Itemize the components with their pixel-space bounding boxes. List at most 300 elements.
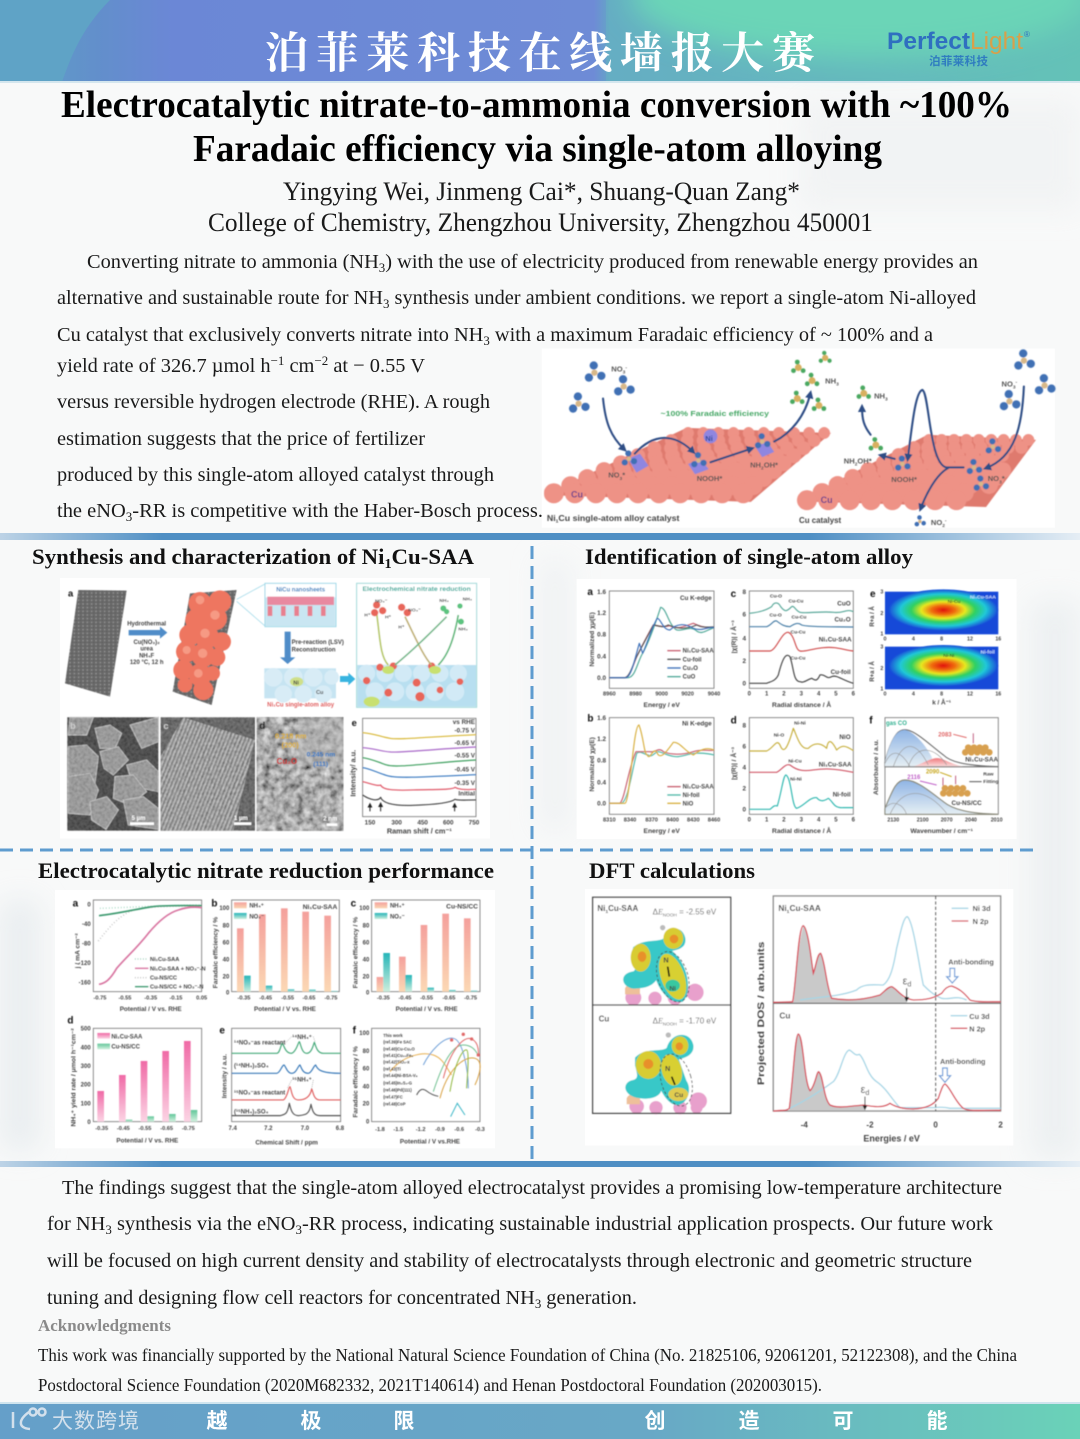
d: Ni EXAFS chart: Ni-Cu	[788, 758, 802, 764]
b: Faradaic efficiency chart Ni1Cu-SAA: 100	[219, 906, 230, 912]
b: SEM image	[67, 717, 158, 831]
scheme labels: 3	[623, 370, 626, 376]
a: Cu K-edge XANES chart: 1.6	[597, 589, 606, 596]
charge density: Cu	[593, 1005, 731, 1114]
abstract text: at − 0.55 V	[328, 355, 425, 377]
abstract text: the eNO	[57, 500, 126, 522]
heading: identification: Identification of single-atom alloy	[585, 544, 914, 569]
a: Cu K-edge XANES chart: Ni₁Cu-SAA	[683, 649, 714, 655]
e: Raman spectra chart: 600	[443, 820, 454, 827]
f: literature comparison chart: (ref.46)Pd(111)	[383, 1087, 412, 1092]
logo: PerfectLight: ®	[1024, 30, 1030, 39]
abstract text: estimation suggests that the price of fertilizer	[57, 428, 425, 450]
e: 1H NMR spectra chart: Chemical Shift / ppm	[255, 1139, 318, 1146]
e: 1H NMR spectra chart: (¹⁴NH₄)₂SO₄	[234, 1063, 269, 1070]
conclusion text: 3	[105, 1222, 112, 1237]
c: Cu EXAFS chart: CuO	[837, 601, 851, 608]
abstract text: produced by this single-atom alloyed catalyst through	[57, 464, 494, 486]
a: Cu K-edge XANES chart: 8960	[603, 692, 616, 698]
a: electrochemical nitrate reduction box: H⁺	[398, 624, 405, 630]
scheme labels: Ni	[547, 514, 555, 523]
e: 1H NMR spectra chart: ¹⁵NO₃⁻as reactant	[234, 1089, 285, 1096]
f: literature comparison chart	[352, 1026, 485, 1145]
d: NH4+ yield rate chart: -0.45	[117, 1126, 130, 1132]
d: NH4+ yield rate chart: -0.75	[182, 1126, 195, 1132]
e: wavelet transform heat maps: 0	[883, 637, 886, 643]
b: Ni K-edge XANES chart: 8370	[645, 818, 658, 824]
conclusion text: 3	[535, 1296, 541, 1311]
scheme labels: ~100% Faradaic efficiency	[661, 409, 770, 418]
a: LSV polarization chart: j / mA cm⁻²	[74, 932, 81, 969]
abstract text: −2	[314, 353, 328, 368]
e: wavelet transform heat maps: 0	[883, 692, 886, 698]
charge density: Cu: NOOH	[663, 1021, 677, 1026]
acknowledgments text	[38, 1345, 1017, 1395]
abstract text: 3	[126, 509, 132, 524]
scheme labels: NH	[750, 460, 761, 469]
b: Faradaic efficiency chart Ni1Cu-SAA: -0.65	[303, 996, 315, 1002]
DOS bottom: Cu	[773, 1010, 1001, 1111]
abstract text: ) with the use of electricity produced from renewable energy provides an	[385, 251, 978, 273]
b: SEM image: b	[70, 721, 76, 731]
c: Faradaic efficiency chart Cu-NS/CC: NH₄⁺	[390, 902, 405, 909]
f: literature comparison chart: Faradaic efficiency / %	[352, 1046, 359, 1118]
a: LSV polarization chart: -0.75	[94, 996, 106, 1002]
divider: vertical dashed	[530, 546, 534, 1162]
e: Raman spectra chart: e	[352, 718, 357, 728]
f: CO stripping absorbance chart: 2116	[907, 775, 921, 781]
c: Faradaic efficiency chart Cu-NS/CC: 40	[363, 957, 370, 963]
reaction arrows	[603, 386, 1024, 509]
f: CO stripping absorbance chart: 2100	[917, 818, 929, 824]
f: literature comparison chart: This work	[383, 1033, 403, 1038]
a: pre-reaction arrow: Reconstruction	[292, 647, 336, 653]
conclusion text: 3	[296, 1222, 302, 1237]
e: wavelet transform heat maps: R+a / Å	[869, 606, 876, 627]
e: wavelet transform heat maps: 2	[880, 666, 883, 672]
e: Raman spectra chart: 750	[469, 820, 480, 827]
a: plate with NiCu nanosheets	[173, 590, 237, 705]
e: wavelet transform heat maps: k / Å⁻¹	[932, 697, 951, 706]
d: NH4+ yield rate chart: Cu-NS/CC	[111, 1045, 141, 1051]
b: Faradaic efficiency chart Ni1Cu-SAA	[211, 898, 339, 1013]
c: Cu EXAFS chart: Cu-Cu	[791, 656, 805, 662]
c: Cu EXAFS chart: 4	[742, 636, 746, 643]
footer slogan: 造	[738, 1410, 760, 1433]
charge density: Cu: ΔE	[653, 1016, 663, 1025]
e: Raman spectra chart: -0.65 V	[455, 740, 476, 747]
acknowledgments heading: Acknowledgments	[38, 1316, 171, 1335]
b: Faradaic efficiency chart Ni1Cu-SAA: NO₂⁻	[249, 914, 264, 920]
charge density: Ni1Cu-SAA	[593, 897, 731, 1006]
e: Raman spectra chart: -0.55 V	[455, 753, 476, 760]
b: Ni K-edge XANES chart: 0.8	[597, 758, 606, 765]
a: pre-reaction arrow: Pre-reaction (LSV)	[292, 640, 344, 646]
panel: synthesis and characterization figure: a	[68, 589, 74, 599]
a: LSV polarization chart: -80	[82, 942, 91, 948]
f: CO stripping absorbance chart: 2040	[965, 818, 977, 824]
f: literature comparison chart: (ref.48)CoP	[383, 1101, 406, 1106]
d: Ni EXAFS chart: 0	[742, 807, 746, 814]
c: Cu EXAFS chart: 0	[748, 692, 752, 698]
a: Cu K-edge XANES chart: Cu-foil	[683, 657, 702, 663]
abstract text	[57, 251, 978, 524]
header banner	[0, 0, 1080, 83]
footer slogan: 能	[926, 1410, 948, 1433]
b: Faradaic efficiency chart Ni1Cu-SAA: b	[211, 898, 217, 909]
e: 1H NMR spectra chart: 7.0	[301, 1126, 310, 1132]
e: Raman spectra chart: 300	[391, 820, 402, 827]
DOS bottom: Cu: N 2p	[969, 1025, 986, 1034]
a: Cu K-edge XANES chart: 0.0	[597, 675, 606, 682]
DOS top: Ni1Cu-SAA: N 2p	[973, 917, 989, 926]
d: TEM image: 0.218 nm	[275, 731, 307, 740]
a: hydrothermal arrow and conditions: NH₄F	[139, 653, 155, 659]
c: Faradaic efficiency chart Cu-NS/CC: 100	[359, 906, 370, 912]
projected DOS chart	[756, 896, 1003, 1144]
f: CO stripping absorbance chart: 2090	[926, 770, 940, 776]
projected DOS chart: -2	[866, 1121, 874, 1130]
e: wavelet transform heat maps: 2	[880, 611, 883, 617]
b: SEM image: 5 µm	[132, 816, 145, 822]
c: Cu EXAFS chart: Cu-Cu	[791, 630, 805, 636]
f: CO stripping absorbance chart: Ni₁Cu-SAA	[965, 757, 998, 764]
Ni sites	[628, 430, 774, 474]
d: NH4+ yield rate chart: 300	[81, 1064, 91, 1070]
b: Ni K-edge XANES chart: 1.6	[597, 715, 606, 722]
d: TEM image: Cu₂O	[277, 757, 297, 766]
b: Ni K-edge XANES chart: Ni K-edge	[682, 721, 712, 728]
charge density: Ni1Cu-SAA: 1	[605, 909, 608, 915]
b: Faradaic efficiency chart Ni1Cu-SAA: 60	[223, 940, 230, 946]
footer slogan	[206, 1410, 948, 1433]
abstract text: 3	[483, 333, 490, 348]
c: Cu EXAFS chart: Radial distance / Å	[772, 700, 831, 709]
divider: top band	[0, 533, 1080, 540]
scheme labels: Cu catalyst	[799, 516, 842, 525]
banner title: 泊菲莱科技在线墙报大赛	[265, 30, 818, 78]
d: Ni EXAFS chart: 0	[748, 818, 752, 824]
e: wavelet transform heat maps: 16	[995, 637, 1001, 643]
authors and affiliation	[208, 177, 873, 237]
watermark logo: 大数跨境	[52, 1410, 139, 1433]
a: pre-reaction arrow	[280, 632, 344, 664]
c: Cu EXAFS chart: 2	[742, 658, 746, 665]
b: Faradaic efficiency chart Ni1Cu-SAA: -0.45	[259, 996, 272, 1002]
e: wavelet transform heat maps: R+a / Å	[869, 661, 876, 682]
projected DOS chart: 2	[998, 1121, 1003, 1130]
authors and affiliation: Yingying Wei, Jinmeng Cai*, Shuang-Quan Zang*	[283, 177, 800, 206]
projected DOS chart: Energies / eV	[863, 1134, 920, 1144]
c: Faradaic efficiency chart Cu-NS/CC: NO₂⁻	[390, 914, 405, 920]
e: 1H NMR spectra chart: Intensity / a.u.	[222, 1054, 229, 1098]
abstract text: with a maximum Faradaic efficiency of ~ 100% and a	[490, 324, 933, 346]
charge density: Ni1Cu-SAA: = -2.55 eV	[677, 907, 717, 916]
scheme labels: 2	[761, 465, 764, 471]
f: literature comparison chart: Potential / V vs.RHE	[400, 1138, 460, 1145]
scheme labels: NO	[608, 471, 620, 480]
a: LSV polarization chart: -0.55	[119, 996, 131, 1002]
e: wavelet transform heat maps: 8	[940, 692, 943, 698]
d: Ni EXAFS chart: Ni-foil	[833, 791, 851, 798]
a: LSV polarization chart: -0.15	[170, 996, 182, 1002]
a: Cu K-edge XANES chart: Energy / eV	[644, 702, 680, 709]
f: CO stripping absorbance chart: 2130	[887, 818, 899, 824]
d: NH4+ yield rate chart: -0.65	[160, 1126, 173, 1132]
conclusion text: synthesis via the eNO	[112, 1213, 296, 1235]
conclusion text: will be focused on high current density and stability of electrocatalysts through electronic and geometric structure	[47, 1250, 972, 1272]
f: CO stripping absorbance chart: 2010	[991, 818, 1003, 824]
f: CO stripping absorbance chart: Fitting	[983, 779, 999, 785]
scheme labels	[547, 365, 1018, 529]
c: Faradaic efficiency chart Cu-NS/CC: 60	[363, 940, 370, 946]
d: Ni EXAFS chart: |χ(R)| / Å⁻³	[729, 746, 738, 780]
e: 1H NMR spectra chart: (¹⁵NH₄)₂SO₄	[234, 1109, 269, 1116]
b: Ni K-edge XANES chart: b	[587, 714, 593, 725]
f: literature comparison chart: (ref.40)Cu-Cu₂O	[383, 1046, 415, 1051]
a: LSV polarization chart: 0.05	[196, 996, 207, 1002]
e: wavelet transform heat maps: 12	[967, 692, 973, 698]
a: electrochemical nitrate reduction box	[357, 583, 477, 707]
f: CO stripping absorbance chart: gas CO	[886, 721, 907, 727]
b: Ni K-edge XANES chart: 1.2	[597, 736, 606, 743]
a: electrochemical nitrate reduction box: H⁺	[385, 614, 392, 620]
scheme labels: NO	[988, 474, 999, 483]
c: SEM image: c	[163, 721, 169, 731]
c: Faradaic efficiency chart Cu-NS/CC: 0	[366, 990, 370, 996]
e: 1H NMR spectra chart: e	[219, 1026, 225, 1037]
heading: electrocatalytic performance: Electrocatalytic nitrate reduction performance	[38, 858, 494, 883]
acknowledgments text: This work was financially supported by the National Natural Science Foundation of China (No. 21825106, 92061201, 52122308), and the China	[38, 1345, 1017, 1365]
c: Cu EXAFS chart: Cu-O	[770, 613, 782, 619]
f: literature comparison chart: 100	[359, 1031, 370, 1037]
DOS bottom: Cu: Cu	[779, 1010, 790, 1020]
d: NH4+ yield rate chart: d	[67, 1016, 73, 1027]
d: Ni EXAFS chart: Radial distance / Å	[772, 826, 831, 835]
c: Faradaic efficiency chart Cu-NS/CC: -0.75	[464, 996, 477, 1002]
logo: PerfectLight: Light	[970, 28, 1023, 55]
d: NH4+ yield rate chart: 200	[81, 1083, 91, 1089]
f: literature comparison chart: -1.2	[416, 1127, 426, 1133]
panel: electrocatalytic performance figure	[55, 890, 495, 1148]
b: Ni K-edge XANES chart: 0.4	[597, 779, 606, 786]
heading: synthesis: Synthesis and characterization of Ni	[32, 544, 380, 569]
c: Cu EXAFS chart: 4	[817, 692, 821, 698]
scheme labels: NH	[825, 376, 836, 385]
e: Raman spectra chart: -0.45 V	[455, 767, 476, 774]
a: hydrothermal arrow and conditions: Cu(NO₃)₂	[133, 640, 160, 646]
f: literature comparison chart: 60	[363, 1067, 370, 1073]
c: Faradaic efficiency chart Cu-NS/CC: -0.55	[420, 996, 433, 1002]
a: electrochemical nitrate reduction box: NO₃⁻	[408, 608, 421, 614]
e: wavelet transform heat maps: 3	[880, 644, 883, 650]
DOS bottom: Cu: Anti-bonding	[940, 1057, 986, 1066]
scheme labels: OH*	[857, 456, 872, 465]
scheme labels: NH	[844, 456, 855, 465]
d: TEM image: 2 nm	[323, 817, 337, 823]
a: Cu K-edge XANES chart: 0.8	[597, 632, 606, 639]
e: Raman spectra chart: -0.35 V	[455, 780, 476, 787]
c: Faradaic efficiency chart Cu-NS/CC: -0.45	[399, 996, 411, 1002]
b: Ni K-edge XANES chart: 8460	[708, 818, 720, 824]
c: Cu EXAFS chart: 6	[742, 612, 746, 619]
scheme labels: Cu	[571, 490, 583, 500]
e: Raman spectra chart: Intensity/ a.u.	[348, 750, 357, 797]
charge density: Cu: Cu	[674, 1092, 683, 1099]
acknowledgments text: Postdoctoral Science Foundation (2020M682332, 2021T140614) and Henan Postdoctoral Foundation (202003015).	[38, 1375, 822, 1395]
scheme labels: 1	[556, 519, 559, 524]
c: Cu EXAFS chart: 5	[834, 692, 838, 698]
footer slogan: 极	[300, 1410, 322, 1433]
c: Cu EXAFS chart	[729, 589, 856, 709]
e: 1H NMR spectra chart: ¹⁴NH₄⁺	[292, 1034, 312, 1041]
logo: PerfectLight: 泊菲莱科技	[929, 54, 988, 68]
b: Faradaic efficiency chart Ni1Cu-SAA: Potential / V vs. RHE	[254, 1006, 316, 1013]
a: hydrothermal arrow and conditions	[127, 621, 167, 666]
f: CO stripping absorbance chart: Absorbance / a.u.	[873, 739, 880, 795]
f: literature comparison chart: 80	[363, 1049, 370, 1055]
d: NH4+ yield rate chart: 0	[87, 1120, 91, 1126]
f: CO stripping absorbance chart: f	[869, 716, 873, 727]
a: LSV polarization chart: -120	[79, 961, 91, 967]
charge density: Cu: N	[665, 1064, 670, 1073]
abstract text: Converting nitrate to ammonia (NH	[87, 251, 381, 273]
a: NiCu nanosheets inset: NiCu nanosheets	[276, 588, 326, 594]
heading: synthesis: 1	[384, 557, 392, 572]
scheme labels: 3	[620, 476, 623, 482]
f: literature comparison chart: (ref.45)In₂S₃-G	[383, 1080, 412, 1085]
b: Faradaic efficiency chart Ni1Cu-SAA: Faradaic efficiency / %	[212, 917, 219, 988]
f: literature comparison chart: (ref.43)Ti	[383, 1066, 401, 1071]
d: NH4+ yield rate chart: Potential / V vs. RHE	[116, 1137, 178, 1144]
b: Ni K-edge XANES chart: 8340	[624, 818, 636, 824]
a: Cu K-edge XANES chart: 1.2	[597, 610, 606, 617]
poster title	[61, 84, 1012, 170]
charge density: Ni1Cu-SAA: NOOH	[663, 912, 677, 917]
a: LSV polarization chart	[73, 898, 207, 1013]
f: CO stripping absorbance chart: 2083	[938, 732, 952, 738]
e: wavelet transform heat maps	[869, 589, 1001, 706]
a: Cu K-edge XANES chart	[587, 587, 720, 709]
a: connecting arrow	[340, 673, 355, 685]
e: 1H NMR spectra chart	[219, 1026, 345, 1146]
conclusion text: The findings suggest that the single-atom alloyed electrocatalyst provides a promising low-temperature architecture	[62, 1177, 1002, 1199]
panel: single-atom alloy identification figure	[577, 579, 1017, 839]
b: Faradaic efficiency chart Ni1Cu-SAA: 20	[223, 974, 230, 980]
d: Ni EXAFS chart: Ni-Ni	[794, 720, 806, 726]
f: CO stripping absorbance chart: 2070	[941, 818, 953, 824]
scheme labels: NO	[611, 365, 623, 374]
e: wavelet transform heat maps: e	[870, 589, 876, 600]
scheme labels: Cu single-atom alloy catalyst	[558, 514, 680, 523]
abstract text: cm	[284, 355, 314, 377]
conclusion text: for NH	[47, 1213, 106, 1235]
scheme labels: 3	[1013, 385, 1016, 391]
c: Cu EXAFS chart: c	[731, 589, 737, 600]
charge density: Ni1Cu-SAA: Ni	[597, 904, 605, 913]
surface: Ni1Cu single-atom alloy	[544, 428, 831, 502]
a: LSV polarization chart: a	[73, 898, 79, 909]
d: NH4+ yield rate chart: -0.35	[95, 1126, 108, 1132]
scheme labels: Ni	[705, 434, 713, 443]
a: Cu K-edge XANES chart: 9000	[655, 692, 668, 698]
a: Cu K-edge XANES chart: a	[587, 587, 593, 598]
e: wavelet transform heat maps: 4	[912, 637, 915, 643]
e: Raman spectra chart: -0.75 V	[455, 728, 476, 735]
c: Cu EXAFS chart: 2	[782, 692, 786, 698]
c: Faradaic efficiency chart Cu-NS/CC: Cu-NS/CC	[446, 903, 478, 910]
a: Ni1Cu single-atom alloy inset: Ni	[293, 680, 299, 686]
f: literature comparison chart: (ref.47)FC	[383, 1094, 403, 1099]
c: Cu EXAFS chart: Cu₂O	[834, 617, 851, 624]
abstract text: synthesis under ambient conditions. we report a single-atom Ni-alloyed	[389, 287, 976, 309]
c: Cu EXAFS chart: Cu-Cu	[792, 614, 806, 620]
scheme labels: NO	[931, 518, 942, 527]
b: Ni K-edge XANES chart: Ni₁Cu-SAA	[683, 785, 714, 791]
a: LSV polarization chart: -40	[82, 922, 91, 928]
b: Faradaic efficiency chart Ni1Cu-SAA: NH₄⁺	[249, 902, 264, 909]
DOS top: Ni1Cu-SAA: ε	[903, 975, 907, 987]
f: CO stripping absorbance chart	[869, 716, 1003, 835]
e: Raman spectra chart: 450	[417, 820, 428, 827]
d: Ni EXAFS chart: 3	[800, 818, 804, 824]
panel: synthesis and characterization figure	[60, 578, 490, 839]
f: literature comparison chart: 40	[363, 1084, 370, 1090]
f: CO stripping absorbance chart: Cu-NS/CC	[952, 800, 982, 807]
a: Ni1Cu single-atom alloy inset: Ni₁Cu single-atom alloy	[267, 703, 335, 709]
a: LSV polarization chart: -160	[79, 980, 91, 986]
panel: reaction scheme	[542, 349, 1056, 529]
d: TEM image: (111)	[313, 761, 328, 768]
c: Faradaic efficiency chart Cu-NS/CC: Potential / V vs. RHE	[396, 1006, 458, 1013]
a: LSV polarization chart: Potential / V vs. RHE	[120, 1006, 182, 1013]
projected DOS chart: 0	[933, 1121, 938, 1130]
scheme labels: *	[1002, 474, 1005, 483]
logo: PerfectLight	[887, 28, 1030, 68]
a: hydrothermal arrow and conditions: urea	[140, 647, 154, 653]
f: literature comparison chart: -1.5	[393, 1127, 403, 1133]
e: wavelet transform heat maps: Ni-Cu	[948, 599, 961, 605]
e: 1H NMR spectra chart: ¹⁵NH₄⁺	[292, 1077, 312, 1084]
f: CO stripping absorbance chart: Raw	[983, 772, 994, 778]
c: Cu EXAFS chart: 6	[852, 692, 856, 698]
d: TEM image: 0.245 nm	[307, 752, 335, 759]
c: Faradaic efficiency chart Cu-NS/CC: Faradaic efficiency / %	[352, 917, 359, 988]
a: LSV polarization chart: 0	[87, 903, 91, 909]
a: electrochemical nitrate reduction box: Electrochemical nitrate reduction	[362, 587, 471, 593]
b: Faradaic efficiency chart Ni1Cu-SAA: -0.75	[325, 996, 337, 1002]
d: NH4+ yield rate chart: 100	[81, 1101, 91, 1107]
d: NH4+ yield rate chart: Ni₁Cu-SAA	[111, 1034, 143, 1040]
footer slogan: 限	[394, 1410, 414, 1433]
e: 1H NMR spectra chart: ¹⁴NO₃⁻as reactant	[234, 1039, 285, 1046]
c: Cu EXAFS chart: 3	[800, 692, 804, 698]
a: Cu K-edge XANES chart: Normalized χμ(E)	[589, 612, 596, 667]
DOS bottom: Cu: d	[865, 1088, 869, 1097]
d: Ni EXAFS chart: Ni₁Cu-SAA	[819, 761, 852, 768]
e: Raman spectra chart: vs RHE	[453, 719, 475, 726]
c: SEM image: 1 µm	[234, 816, 248, 822]
scheme labels: 3	[836, 381, 839, 387]
b: Faradaic efficiency chart Ni1Cu-SAA: Ni₁Cu-SAA	[303, 904, 337, 911]
scheme labels: OH*	[764, 460, 778, 469]
f: literature comparison chart: (ref.41)Cu₅₀Fe₅	[383, 1053, 413, 1058]
d: TEM image: d	[259, 721, 265, 732]
poster title: Electrocatalytic nitrate-to-ammonia conversion with ~100%	[61, 84, 1012, 126]
logo: PerfectLight: Perfect	[887, 28, 970, 55]
f: literature comparison chart: 20	[363, 1102, 370, 1108]
f: literature comparison chart: 0	[366, 1119, 370, 1125]
